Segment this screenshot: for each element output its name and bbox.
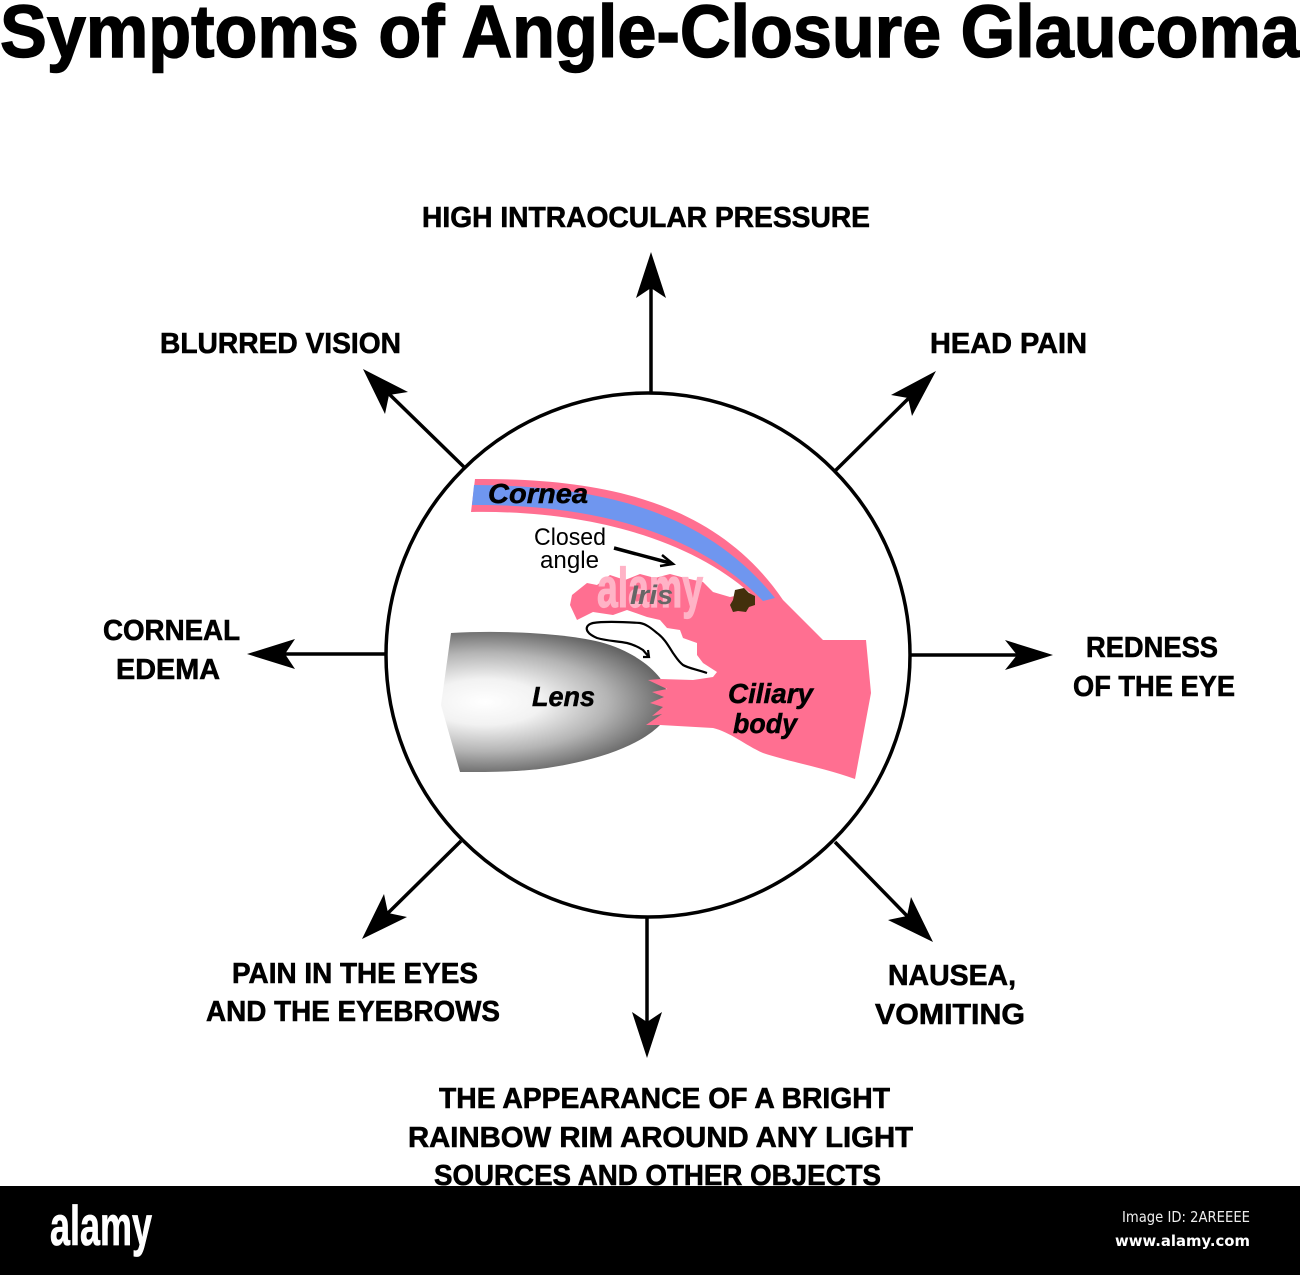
pink tissue: cornea sheath, iris and ciliary body	[471, 479, 871, 779]
label: rainbow rim	[408, 1083, 913, 1192]
label: rainbow rim: RAINBOW RIM AROUND ANY LIGHT	[408, 1122, 913, 1154]
footer band	[0, 1186, 1300, 1275]
website: www.alamy.com	[1115, 1232, 1250, 1250]
label: corneal edema: CORNEAL	[103, 615, 240, 647]
arrow: right	[911, 640, 1053, 670]
ciliary body label: body	[733, 708, 798, 739]
label: pain in the eyes and the eyebrows: PAIN IN THE EYES	[232, 958, 478, 990]
central circle	[386, 393, 910, 917]
label: nausea, vomiting: VOMITING	[875, 999, 1025, 1031]
label: nausea, vomiting: NAUSEA,	[888, 960, 1016, 992]
label: pain in the eyes and the eyebrows	[206, 958, 500, 1028]
label: redness of the eye: OF THE EYE	[1073, 671, 1235, 703]
label: corneal edema: EDEMA	[116, 654, 220, 686]
label: pain in the eyes and the eyebrows: AND THE EYEBROWS	[206, 996, 500, 1028]
fluid flow arrow	[587, 622, 707, 673]
lens	[441, 632, 672, 772]
closed angle arrow	[614, 548, 673, 566]
watermark: alamy	[597, 556, 703, 619]
arrow: upper left	[363, 369, 464, 467]
arrow: lower left	[362, 841, 461, 939]
label: rainbow rim: SOURCES AND OTHER OBJECTS	[434, 1160, 881, 1192]
cornea blue band	[472, 485, 775, 601]
label: head pain: HEAD PAIN	[930, 328, 1087, 360]
eye diagram	[441, 478, 871, 779]
footer logo: alamy	[50, 1194, 152, 1257]
arrow: left	[247, 639, 385, 669]
trabecular blockage	[730, 588, 755, 612]
arrow: lower right	[835, 842, 933, 942]
label: blurred vision: BLURRED VISION	[160, 328, 401, 360]
label: corneal edema	[103, 615, 240, 686]
arrow: down	[632, 918, 662, 1058]
label: rainbow rim: THE APPEARANCE OF A BRIGHT	[439, 1083, 890, 1115]
closed angle label: angle	[540, 547, 599, 574]
label: nausea, vomiting	[875, 960, 1025, 1031]
cornea label: Cornea	[488, 478, 588, 509]
iris label: Iris	[630, 580, 673, 610]
ciliary body label	[728, 678, 814, 739]
arrow: upper right	[835, 371, 936, 471]
lens label: Lens	[532, 681, 595, 712]
label: redness of the eye: REDNESS	[1086, 632, 1218, 664]
label: high intraocular pressure: HIGH INTRAOCULAR PRESSURE	[422, 202, 870, 234]
label: redness of the eye	[1073, 632, 1235, 703]
closed angle label: Closed	[534, 524, 606, 551]
closed angle label	[534, 524, 606, 574]
image id: Image ID: 2AREEEE	[1122, 1208, 1250, 1226]
arrow: up	[636, 252, 666, 392]
ciliary body label: Ciliary	[728, 678, 814, 709]
